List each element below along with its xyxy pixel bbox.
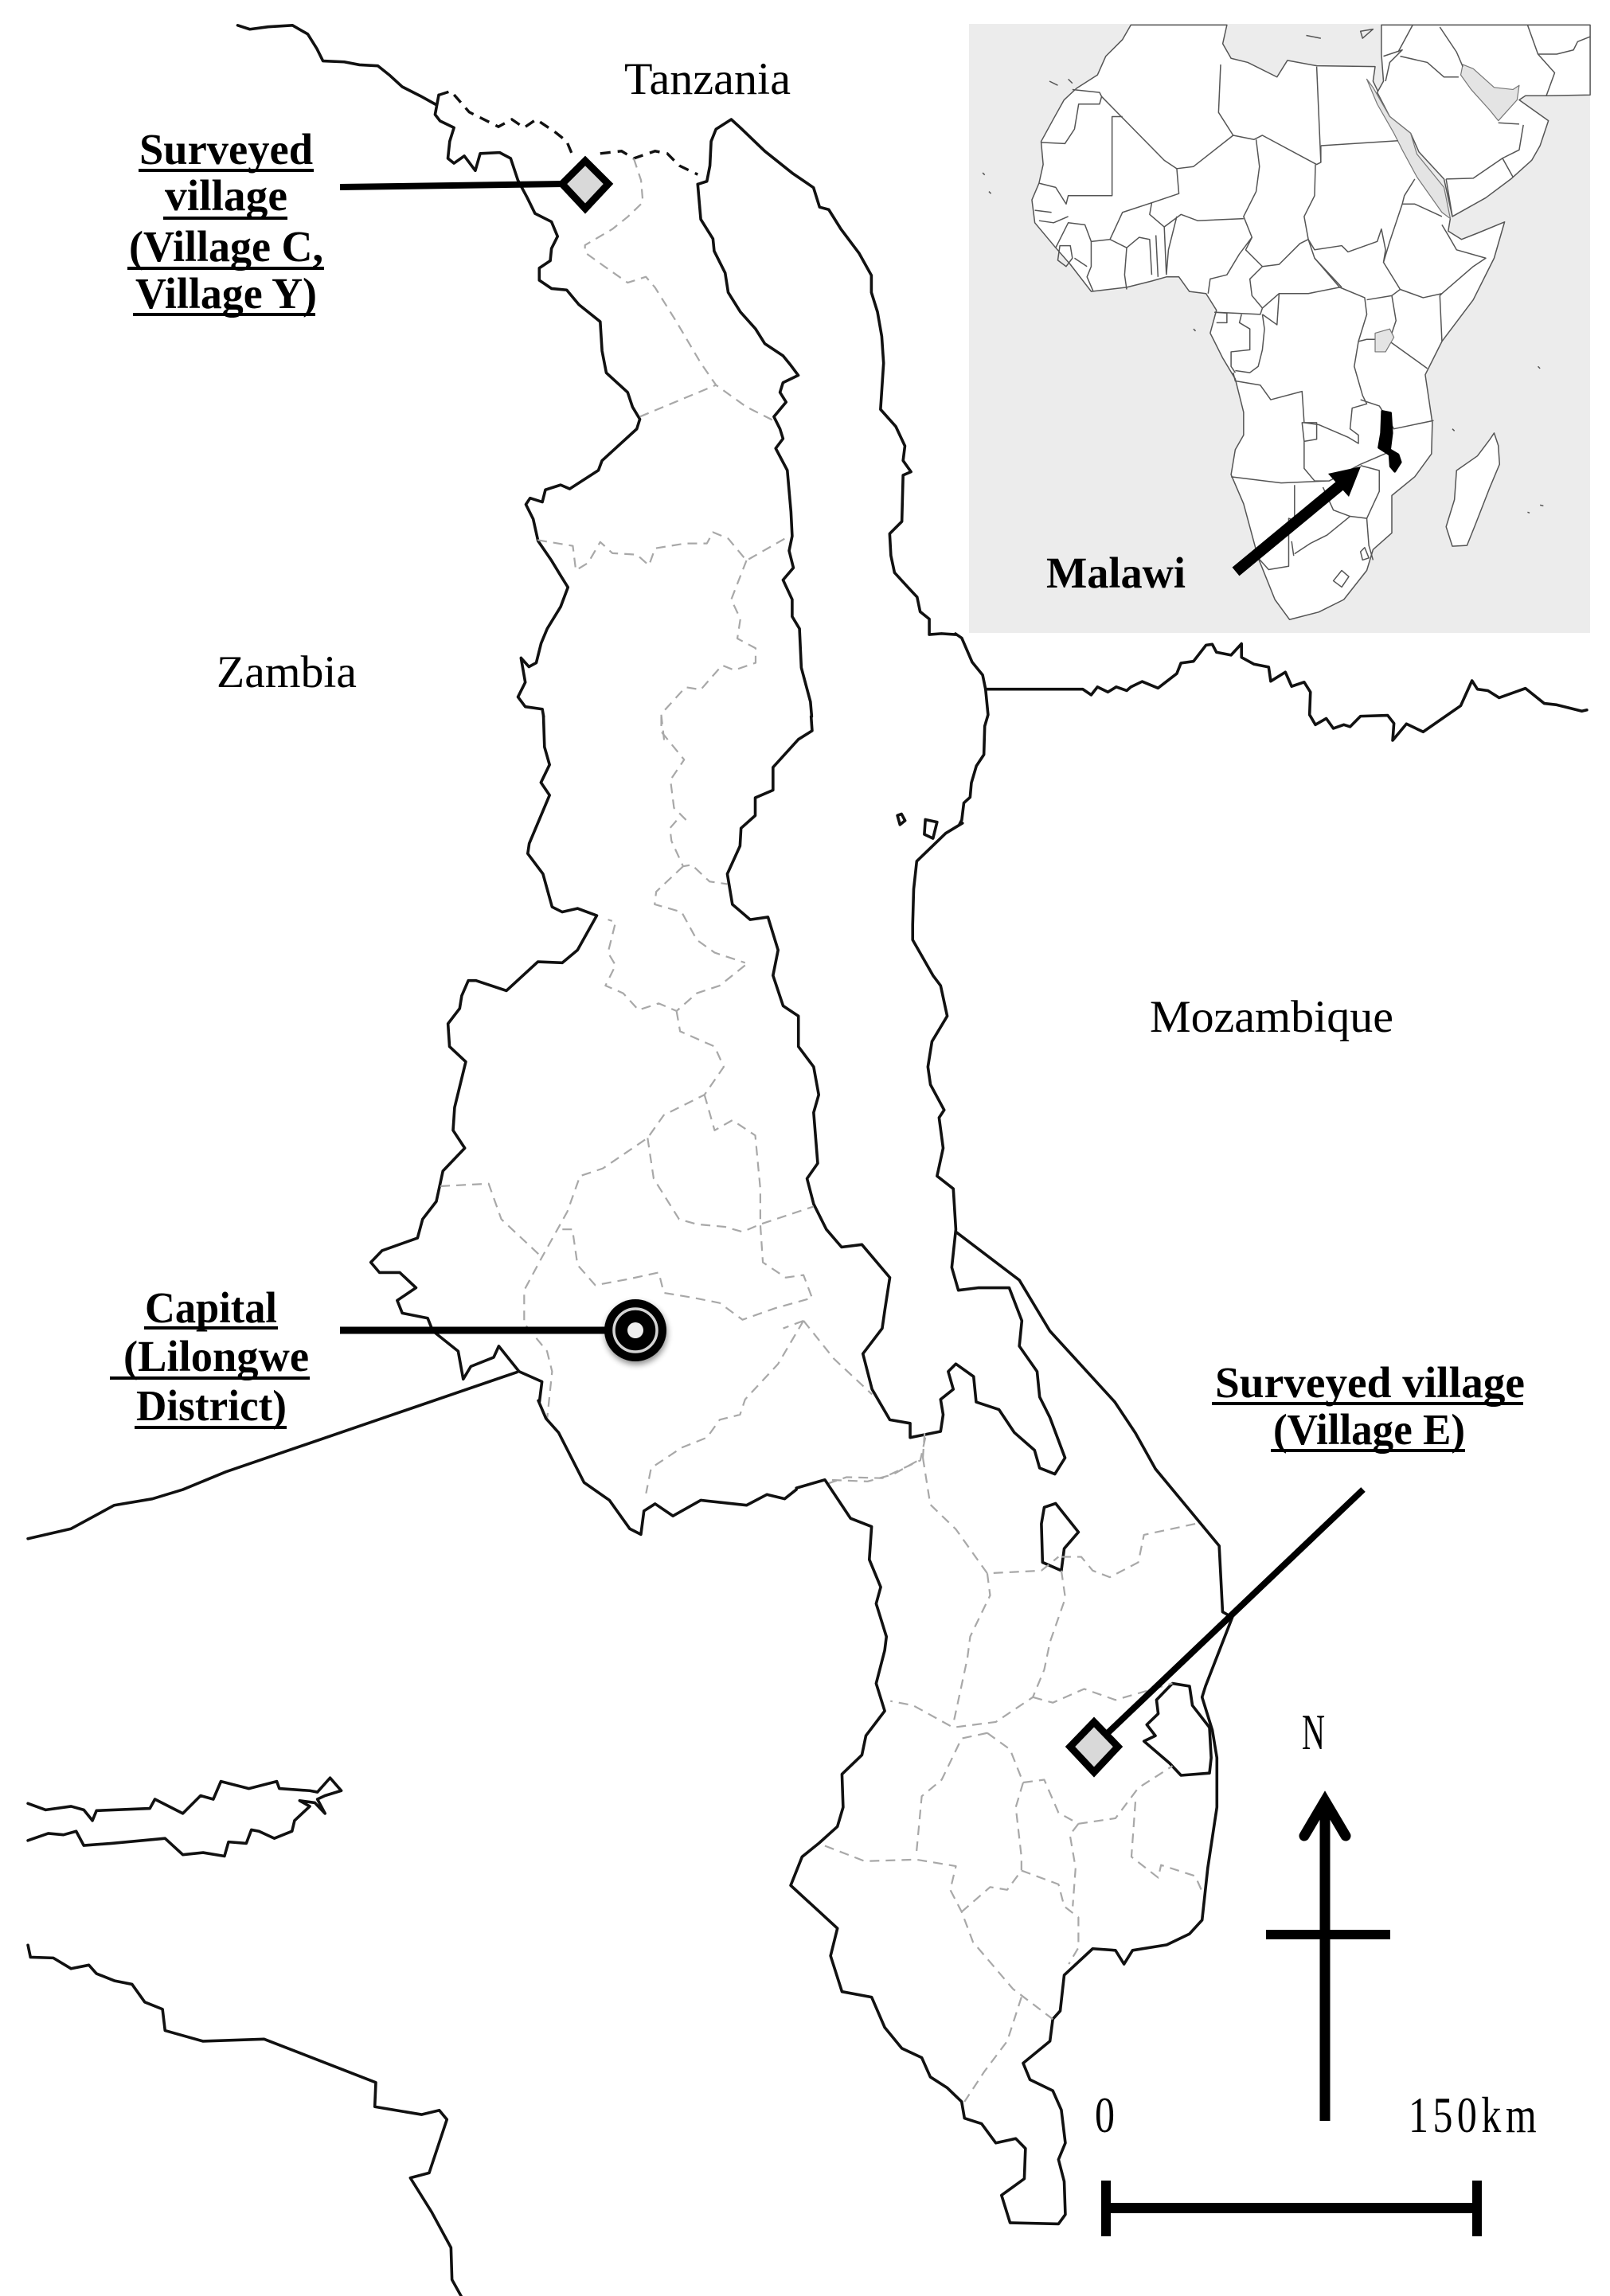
text: capital label: (Lilongwe — [123, 1332, 309, 1380]
text: capital label: Capital — [145, 1283, 277, 1332]
small islands — [983, 29, 1543, 513]
label: Tanzania: Tanzania — [624, 54, 791, 104]
callout: capital Lilongwe — [110, 1283, 667, 1430]
Zambezi river and Lake Cahora Bassa — [28, 1778, 342, 1857]
text: surveyed village E: Surveyed village — [1215, 1358, 1525, 1407]
text: capital label: District) — [136, 1381, 287, 1430]
Lake Chilwa — [1144, 1684, 1211, 1775]
label: 150km: 150km — [1409, 2087, 1537, 2143]
icon: capital bullseye — [604, 1299, 667, 1365]
Malawi highlighted in black — [1379, 412, 1401, 471]
label: N: N — [1302, 1704, 1325, 1760]
text: capital label — [110, 1283, 310, 1430]
Lake Malombe — [1041, 1503, 1078, 1571]
arrow: pointer to Malawi — [1236, 467, 1361, 572]
panel: inset map of Africa — [969, 24, 1590, 633]
Red Sea — [1367, 79, 1450, 219]
compass: north arrow — [1266, 1704, 1390, 2121]
Zambia-Mozambique border — [28, 1373, 517, 1539]
scale bar — [1095, 2087, 1537, 2236]
label: Malawi: Malawi — [1046, 549, 1186, 597]
text: surveyed village E — [1212, 1358, 1525, 1454]
text: surveyed village C and Y — [127, 125, 324, 318]
text: surveyed village C and Y: (Village C, — [129, 222, 323, 271]
Mozambique-Zimbabwe border — [28, 1945, 461, 2296]
Lake Malawi eastern shore, north — [698, 119, 955, 635]
leader line to south village — [1108, 1490, 1363, 1732]
text: surveyed village E: (Village E) — [1273, 1405, 1465, 1454]
Malawi-Mozambique border, upper — [955, 1232, 1115, 1402]
country borders — [1035, 25, 1590, 587]
Lake Malawi east shore — [955, 634, 988, 824]
Malawi southern region outline — [791, 1402, 1233, 2224]
callout: surveyed village E — [1070, 1358, 1525, 1772]
Arabia and Middle East land mass — [1377, 25, 1590, 217]
Tanzania-Mozambique border — [986, 644, 1587, 740]
text: surveyed village C and Y: Village Y) — [135, 269, 317, 318]
Lake Malawi western shore, centre — [727, 717, 1065, 1474]
Lake Victoria — [1375, 329, 1394, 352]
Tanzania-Zambia border — [237, 25, 436, 105]
Lake Malawi western shore, north — [698, 184, 811, 717]
Malawi-Tanzania dashed border — [439, 91, 698, 174]
Africa land mass — [1032, 25, 1505, 619]
label: Zambia: Zambia — [217, 647, 357, 697]
label: Mozambique: Mozambique — [1150, 992, 1393, 1042]
Malawi western border, centre — [371, 717, 597, 1402]
callout: surveyed village C and Y — [127, 125, 608, 318]
icon: south village diamond — [1070, 1722, 1118, 1772]
district boundaries, south — [825, 1433, 1204, 2102]
leader line to north village — [340, 184, 564, 187]
icon: north village diamond — [562, 161, 608, 209]
text: surveyed village C and Y: Surveyed — [139, 125, 313, 174]
Malawi southwest border — [538, 1400, 796, 1534]
district boundaries, centre — [440, 717, 925, 1494]
district boundaries, north — [537, 158, 789, 741]
islands in Lake Malawi — [897, 814, 937, 838]
text: surveyed village C and Y: village — [165, 171, 287, 220]
label: 0: 0 — [1095, 2087, 1115, 2143]
leader line to capital — [340, 1326, 609, 1334]
Madagascar — [1446, 433, 1499, 546]
Persian Gulf water — [1461, 64, 1519, 121]
Malawi northwest border — [435, 95, 640, 717]
